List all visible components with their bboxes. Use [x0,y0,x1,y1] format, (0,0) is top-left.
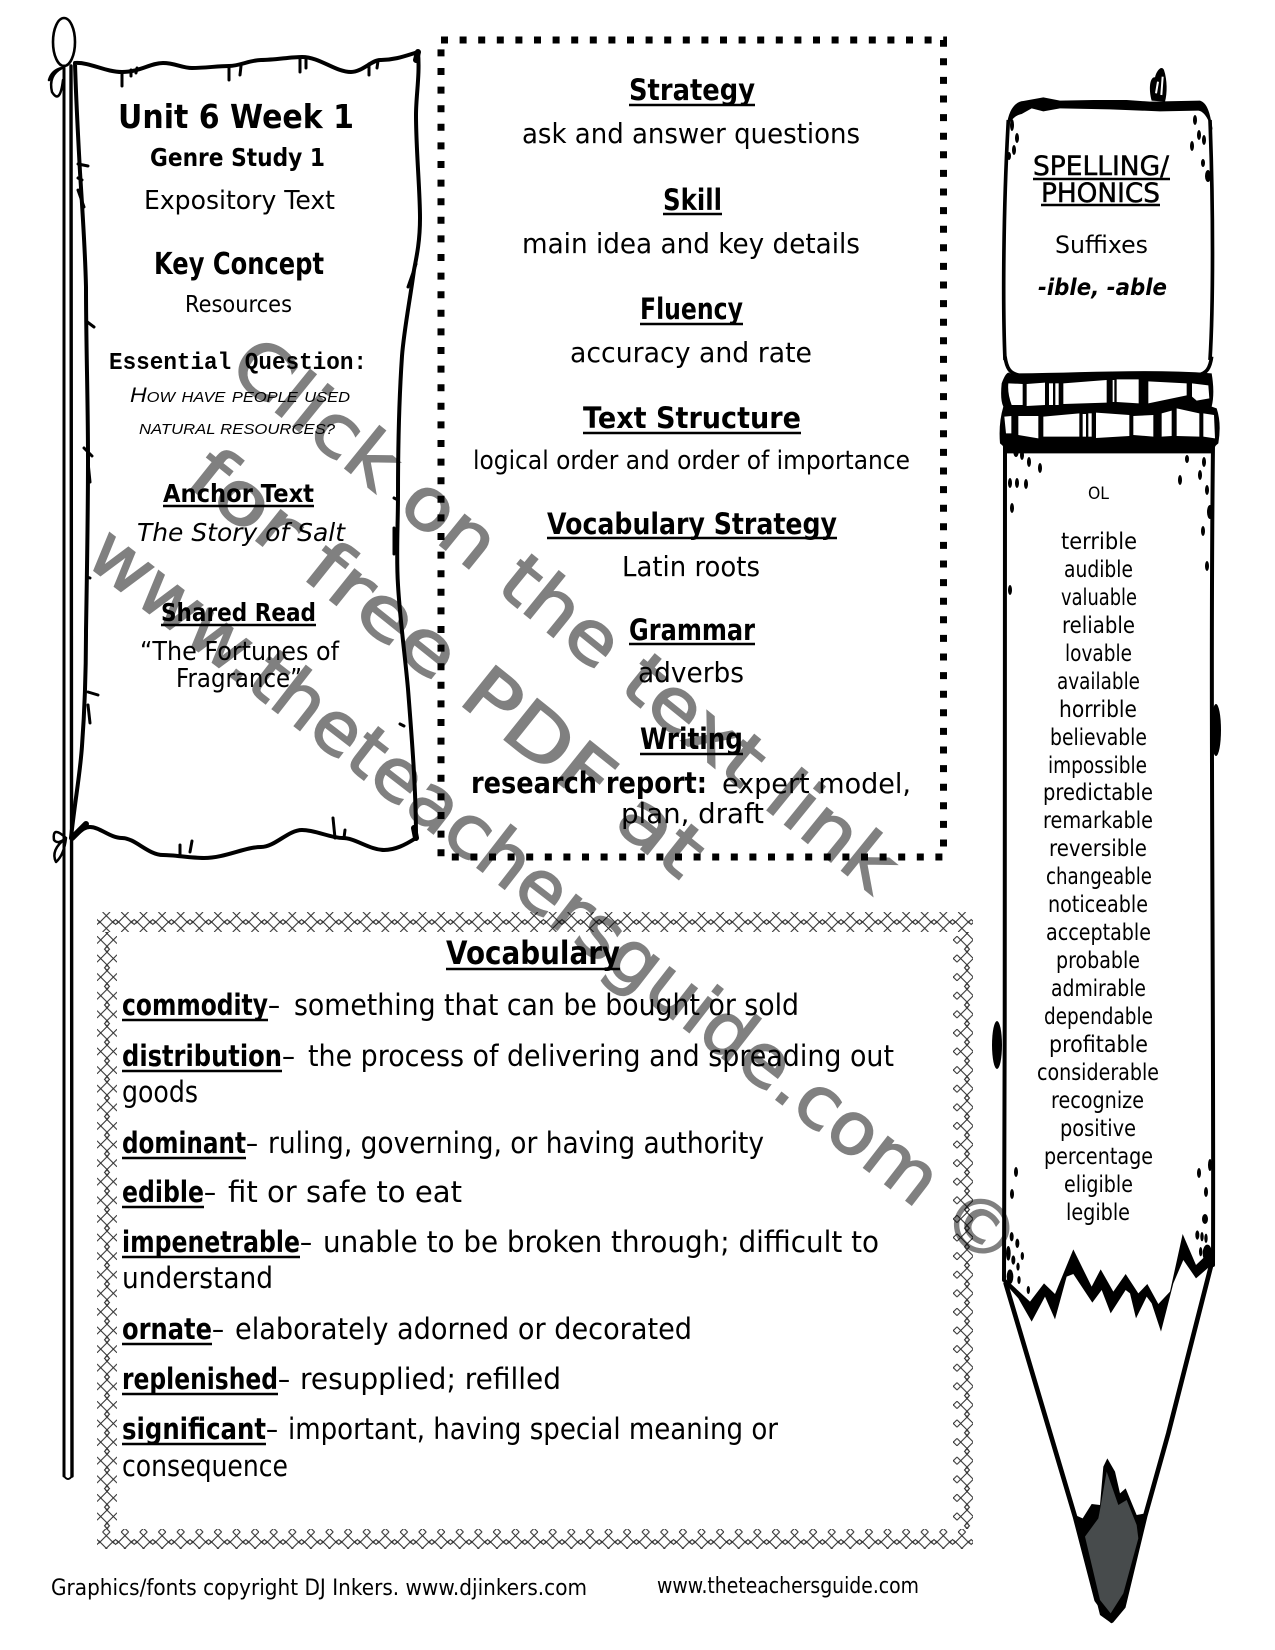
writing [471,722,911,830]
text structure: Text Structure [583,401,801,435]
spelling heading [1033,151,1170,209]
tip sides [1006,1263,1212,1621]
writing: research report: [471,766,707,800]
spelling word list: eligible [1064,1172,1133,1198]
panel: banner text [109,97,367,694]
essential question heading: Essential Question: [109,350,367,377]
essential question text [130,384,350,439]
wood edge jagged line [1005,1234,1213,1332]
anchor text heading: Anchor Text [163,479,314,508]
fluency [570,292,812,369]
writing: expert model, [722,767,911,800]
footer: copyright: Graphics/fonts copyright DJ Inkers. www.djinkers.com [51,1576,587,1601]
pencil body outline [1004,445,1213,1280]
shared read title [140,637,340,694]
term: distribution [122,1039,894,1109]
suffixes: -ible, -able [1038,275,1167,301]
strategy: ask and answer questions [522,117,860,150]
grammar: adverbs [638,656,744,689]
text structure: logical order and order of importance [473,446,910,476]
fluency: Fluency [640,292,743,326]
term: dominant: – [246,1126,258,1160]
key concept heading: Key Concept [154,247,324,282]
spelling word list: valuable [1061,585,1137,611]
icon: top edge [1007,97,1213,130]
term: edible: – [204,1175,216,1209]
level label: OL [1088,484,1109,504]
icon: pencil tie [1150,68,1167,102]
term: distribution: the process of delivering and spreading out [308,1039,894,1073]
spelling word list: probable [1056,948,1140,974]
term: ornate: – [212,1312,224,1346]
shared read heading: Shared Read [161,598,316,627]
term: dominant: ruling, governing, or having authority [268,1126,764,1160]
shared read title: Fragrance” [176,664,302,694]
term: significant: important, having special meaning or [288,1412,778,1446]
panel: skills text [471,73,911,830]
panel: banner flag outline [71,52,420,858]
pencil side blob right [1211,704,1221,756]
skill: main idea and key details [522,227,860,260]
watermark: for free PDF at [173,431,722,894]
term: edible [122,1175,462,1209]
skill: Skill [663,183,722,217]
term: impenetrable: impenetrable [122,1225,300,1259]
spelling word list [1037,529,1159,1226]
text structure [473,401,910,476]
subtitle: Genre Study 1 [150,143,325,172]
spelling word list: predictable [1043,780,1153,806]
title: Unit 6 Week 1 [118,97,354,136]
spelling word list: audible [1064,557,1133,583]
grammar: Grammar [629,613,756,647]
spelling word list: reliable [1062,613,1135,639]
term: ornate: ornate [122,1312,212,1346]
spelling word list: reversible [1049,836,1147,862]
term: impenetrable: unable to be broken through; difficult to [323,1225,879,1259]
spelling word list: dependable [1044,1004,1153,1030]
lead grey [1085,1472,1138,1613]
pencil side blob left [992,1021,1002,1069]
term: distribution: goods [122,1075,198,1109]
spelling word list: percentage [1044,1144,1153,1170]
spelling word list: available [1057,669,1140,695]
vocabulary heading: Vocabulary [446,934,620,972]
cap bottom corners [1005,357,1212,375]
grammar [629,613,756,689]
pencil speckles [992,115,1221,1224]
term: commodity: something that can be bought or sold [294,988,799,1022]
vocabulary strategy: Latin roots [622,550,760,583]
footer: website: www.theteachersguide.com [657,1574,919,1599]
term: distribution: distribution [122,1039,282,1073]
vocabulary strategy: Vocabulary Strategy [547,507,837,541]
strategy: Strategy [629,73,755,107]
panel: vocabulary text [122,934,894,1483]
spelling word list: positive [1060,1116,1136,1142]
spelling topic: Suffixes [1055,231,1148,259]
term: significant: significant [122,1412,266,1446]
term: replenished [122,1362,561,1396]
lead black [1075,1458,1146,1623]
spelling word list: admirable [1051,976,1146,1002]
term: ornate: elaborately adorned or decorated [235,1312,692,1346]
pencil top and cap [1000,68,1220,453]
panel: dotted skills box [441,40,944,857]
genre: Expository Text [144,186,335,216]
term: significant: consequence [122,1449,288,1483]
panel: vocabulary cross-stitch border [97,912,973,1549]
spelling heading: SPELLING/ [1033,151,1170,182]
term: impenetrable [122,1225,879,1295]
fluency: accuracy and rate [570,336,812,369]
spelling word list: profitable [1049,1032,1148,1058]
term: replenished: resupplied; refilled [300,1362,561,1396]
term: replenished: replenished [122,1362,278,1396]
vocabulary strategy [547,507,837,583]
spelling word list: terrible [1061,529,1137,555]
watermark: Click on the text link [215,320,915,909]
watermark: www.theteachersguide.com © [73,509,1037,1283]
term: dominant: dominant [122,1126,246,1160]
term: commodity: – [268,988,280,1022]
essential question text: How have people used [130,384,350,407]
term: impenetrable: understand [122,1261,273,1295]
panel: spelling text [1033,151,1170,1226]
pencil ferrule [1000,371,1220,453]
flag pole [49,18,75,1479]
spelling word list: impossible [1048,753,1147,779]
term: commodity: commodity [122,988,268,1022]
term: distribution: – [282,1039,295,1073]
term: edible: edible [122,1175,204,1209]
pencil sharpened tip [1005,1230,1213,1623]
term: impenetrable: – [300,1225,312,1259]
term: significant: – [266,1412,278,1446]
anchor text title: The Story of Salt [137,518,346,547]
spelling word list: horrible [1059,697,1137,723]
spelling word list: legible [1066,1200,1130,1226]
spelling word list: acceptable [1046,920,1151,946]
skill [522,183,860,260]
spelling word list: lovable [1065,641,1132,667]
writing: Writing [640,722,743,756]
spelling word list: noticeable [1048,892,1148,918]
spelling heading: PHONICS [1041,178,1160,209]
strategy [522,73,860,150]
spelling word list: recognize [1051,1088,1144,1114]
pencil cap outline [1004,120,1212,360]
term: replenished: – [278,1362,290,1396]
key concept value: Resources [185,292,292,318]
spelling word list: remarkable [1043,808,1153,834]
spelling word list: believable [1050,725,1147,751]
spelling word list: considerable [1037,1060,1159,1086]
essential question text: natural resources? [139,416,336,439]
shared read title: “The Fortunes of [140,637,340,667]
speckles at wood edge [1006,1230,1212,1294]
writing: plan, draft [621,797,764,830]
spelling word list: changeable [1046,864,1152,890]
term: significant [122,1412,778,1483]
term: edible: fit or safe to eat [228,1175,462,1209]
